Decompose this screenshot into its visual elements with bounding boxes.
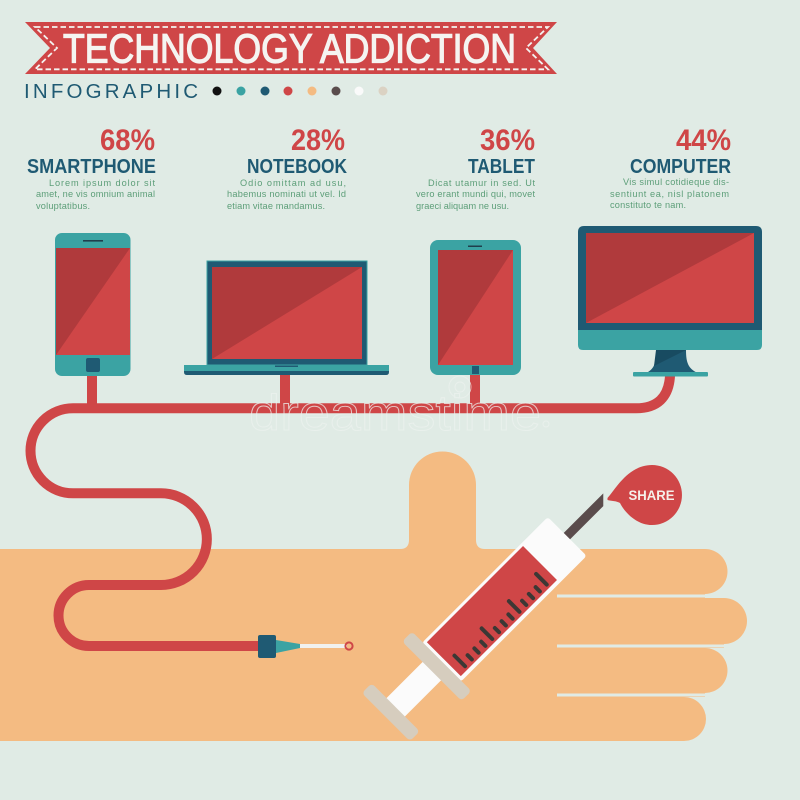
panel: smartphone text	[27, 124, 156, 211]
needle tip on cable	[258, 635, 353, 658]
tablet heading: TABLET	[468, 156, 535, 178]
syringe	[356, 467, 636, 747]
notebook description: habemus nominati ut vel. Id	[227, 189, 346, 199]
computer heading: COMPUTER	[630, 156, 731, 178]
computer description: constituto te nam.	[610, 200, 686, 210]
panel: tablet text	[416, 124, 535, 211]
tablet description	[416, 178, 535, 211]
smartphone heading: SMARTPHONE	[27, 156, 156, 178]
computer description: Vis simul cotidieque dis-	[623, 177, 729, 187]
icon: notebook	[184, 261, 389, 375]
red cable	[30, 376, 670, 646]
watermark: dreamstime	[249, 385, 541, 441]
icon: computer monitor	[578, 226, 762, 376]
syringe barrel	[422, 517, 587, 682]
computer percentage: 44%	[676, 124, 731, 157]
syringe plates	[356, 632, 471, 747]
share label: SHARE	[628, 488, 674, 503]
share drop	[608, 465, 682, 525]
cable branches	[87, 374, 480, 406]
syringe needle	[562, 493, 610, 541]
syringe plunger	[384, 651, 452, 719]
syringe measure ticks	[454, 574, 547, 666]
smartphone description: Lorem ipsum dolor sit	[49, 178, 155, 188]
notebook description	[227, 178, 346, 211]
tablet description: vero erant mundi qui, movet	[416, 189, 535, 199]
subtitle: INFOGRAPHIC	[24, 80, 198, 103]
notebook description: Odio omittam ad usu,	[240, 178, 346, 188]
panel: computer text	[610, 124, 731, 210]
tablet description: graeci aliquam ne usu.	[416, 201, 509, 211]
tablet description: Dicat utamur in sed. Ut	[428, 178, 535, 188]
title: TECHNOLOGY ADDICTION	[63, 26, 516, 72]
syringe fluid	[427, 546, 557, 676]
smartphone description: voluptatibus.	[36, 201, 90, 211]
notebook description: etiam vitae mandamus.	[227, 201, 325, 211]
tablet percentage: 36%	[480, 124, 535, 157]
panel: notebook text	[227, 124, 347, 211]
hand	[0, 452, 747, 741]
notebook heading: NOTEBOOK	[247, 156, 347, 178]
title ribbon	[25, 22, 557, 74]
smartphone description	[36, 178, 155, 211]
computer description	[610, 177, 729, 210]
smartphone description: amet, ne vis omnium animal	[36, 189, 155, 199]
icon: tablet	[430, 240, 521, 375]
colour palette dots	[212, 86, 388, 96]
computer description: sentiunt ea, nisl platonem	[610, 189, 729, 199]
icon: smartphone	[55, 233, 130, 376]
notebook percentage: 28%	[291, 124, 345, 157]
smartphone percentage: 68%	[100, 124, 155, 157]
